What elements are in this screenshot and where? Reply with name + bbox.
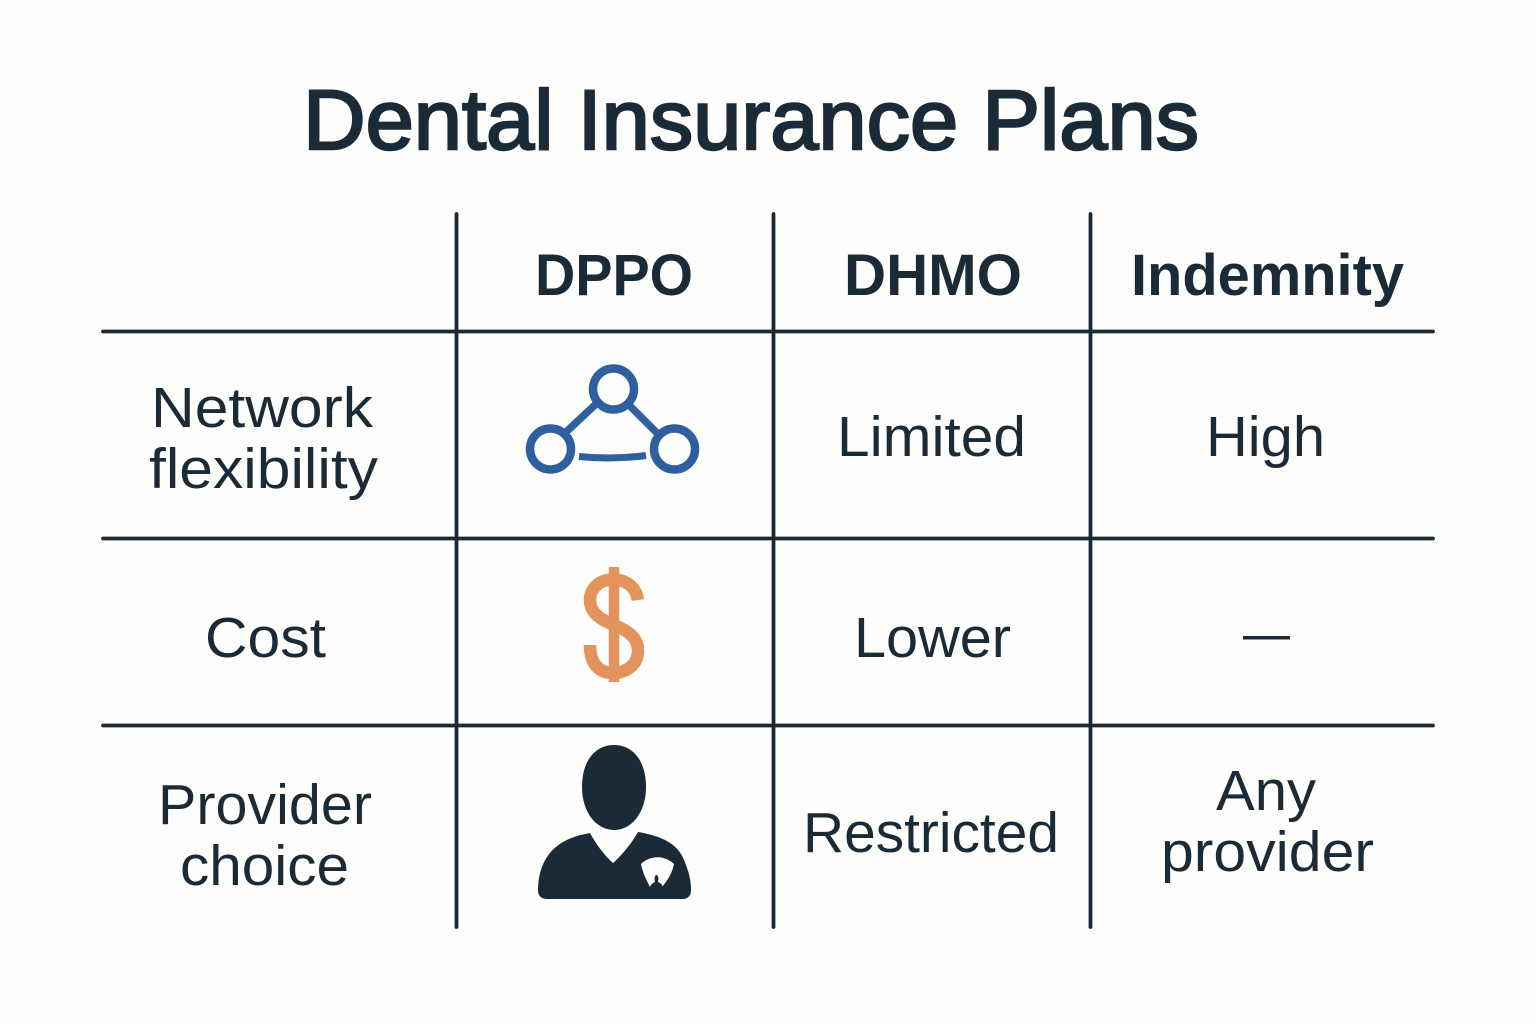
row label: Provider choice: Provider — [158, 773, 372, 837]
column header: Indemnity: Indemnity — [1131, 243, 1404, 308]
icon: provider silhouette with badge — [538, 745, 691, 899]
cell: Any provider: Any — [1216, 759, 1316, 823]
cell: Restricted: Restricted — [803, 801, 1059, 865]
row label: Provider choice — [158, 773, 372, 898]
column header: DPPO: DPPO — [535, 243, 693, 308]
cell: Limited: Limited — [837, 405, 1026, 469]
cell: High: High — [1206, 405, 1325, 469]
row label: Network flexibility: Network — [151, 376, 374, 440]
icon: dollar sign — [590, 567, 638, 682]
row label: Network flexibility — [149, 376, 379, 501]
badge — [641, 857, 674, 887]
column header: DHMO: DHMO — [844, 243, 1022, 308]
icon: network of three nodes — [530, 368, 695, 470]
cell: Lower: Lower — [854, 606, 1011, 670]
row label: Network flexibility: flexibility — [149, 437, 379, 501]
cell: dash — [1243, 636, 1290, 640]
row label: Provider choice: choice — [180, 834, 349, 898]
cell: Any provider — [1161, 759, 1374, 884]
row label: Cost: Cost — [205, 606, 326, 670]
comparison table — [103, 214, 1433, 927]
cell: Any provider: provider — [1161, 820, 1374, 884]
title: Dental Insurance Plans — [303, 73, 1199, 167]
